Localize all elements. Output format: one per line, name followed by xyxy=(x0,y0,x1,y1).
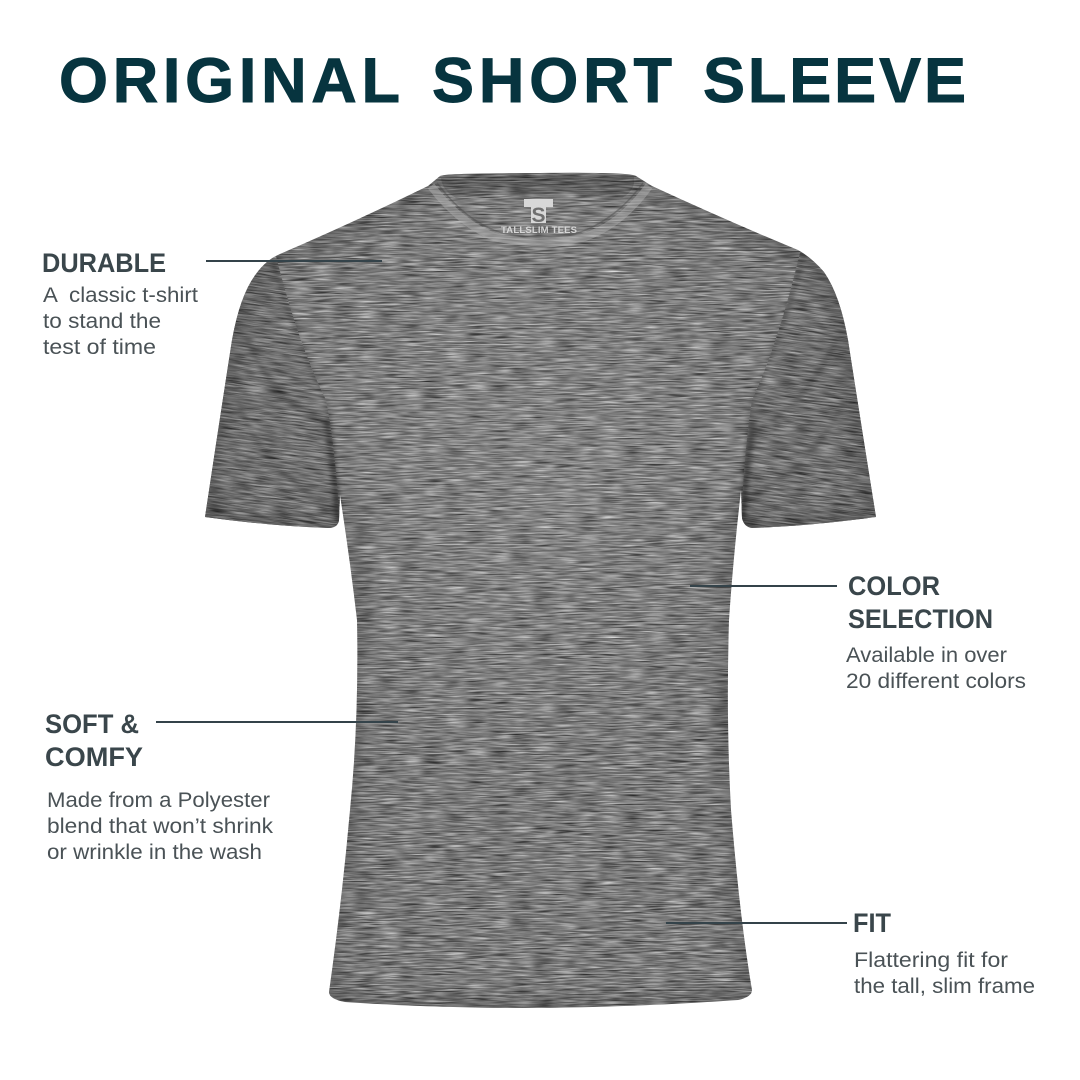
title: ORIGINAL xyxy=(59,46,400,116)
heading: fit: FIT xyxy=(853,908,891,938)
text: color selection xyxy=(846,644,1026,693)
text: durable: A classic t-shirt xyxy=(43,284,198,307)
heading: soft and comfy xyxy=(45,709,143,772)
heading: soft and comfy: COMFY xyxy=(45,742,143,772)
leader line: durable xyxy=(206,260,382,262)
text: durable: test of time xyxy=(43,336,156,359)
text: fit: the tall, slim frame xyxy=(854,975,1035,998)
leader line: soft and comfy xyxy=(156,721,398,723)
text: soft and comfy: blend that won’t shrink xyxy=(47,815,274,838)
heading: durable: DURABLE xyxy=(42,248,166,278)
sleeve folds and seams xyxy=(238,258,845,525)
text: color selection: Available in over xyxy=(846,644,1007,667)
heading: color selection: COLOR xyxy=(848,571,940,601)
title: SHORT xyxy=(432,46,672,116)
text: soft and comfy xyxy=(47,789,274,864)
leader line: color selection xyxy=(690,585,837,587)
collar xyxy=(431,176,649,242)
neck label logo xyxy=(501,199,577,236)
right sleeve texture xyxy=(742,252,876,528)
heading: color selection xyxy=(848,571,993,634)
callout: fit xyxy=(666,908,1035,998)
neck label logo: TALLSLIM TEES xyxy=(501,225,577,236)
text: color selection: 20 different colors xyxy=(846,670,1026,693)
callout: soft and comfy xyxy=(45,709,398,864)
heading: soft and comfy: SOFT & xyxy=(45,709,139,739)
heather fabric texture xyxy=(190,160,890,1020)
left sleeve texture xyxy=(205,256,340,528)
text: soft and comfy: or wrinkle in the wash xyxy=(47,841,262,864)
heading: color selection: SELECTION xyxy=(848,604,993,634)
title xyxy=(59,46,966,116)
text: durable: to stand the xyxy=(43,310,161,333)
body highlight xyxy=(422,337,664,590)
text: fit: Flattering fit for xyxy=(854,949,1008,972)
neck label logo: S xyxy=(531,204,546,227)
text: soft and comfy: Made from a Polyester xyxy=(47,789,270,812)
text: fit xyxy=(854,949,1035,998)
text: durable xyxy=(43,284,198,359)
callout: durable xyxy=(42,248,382,359)
edge shading xyxy=(205,173,876,1008)
title: SLEEVE xyxy=(703,46,966,116)
leader line: fit xyxy=(666,922,847,924)
t-shirt photo xyxy=(205,172,876,1008)
callout: color selection xyxy=(690,571,1026,693)
